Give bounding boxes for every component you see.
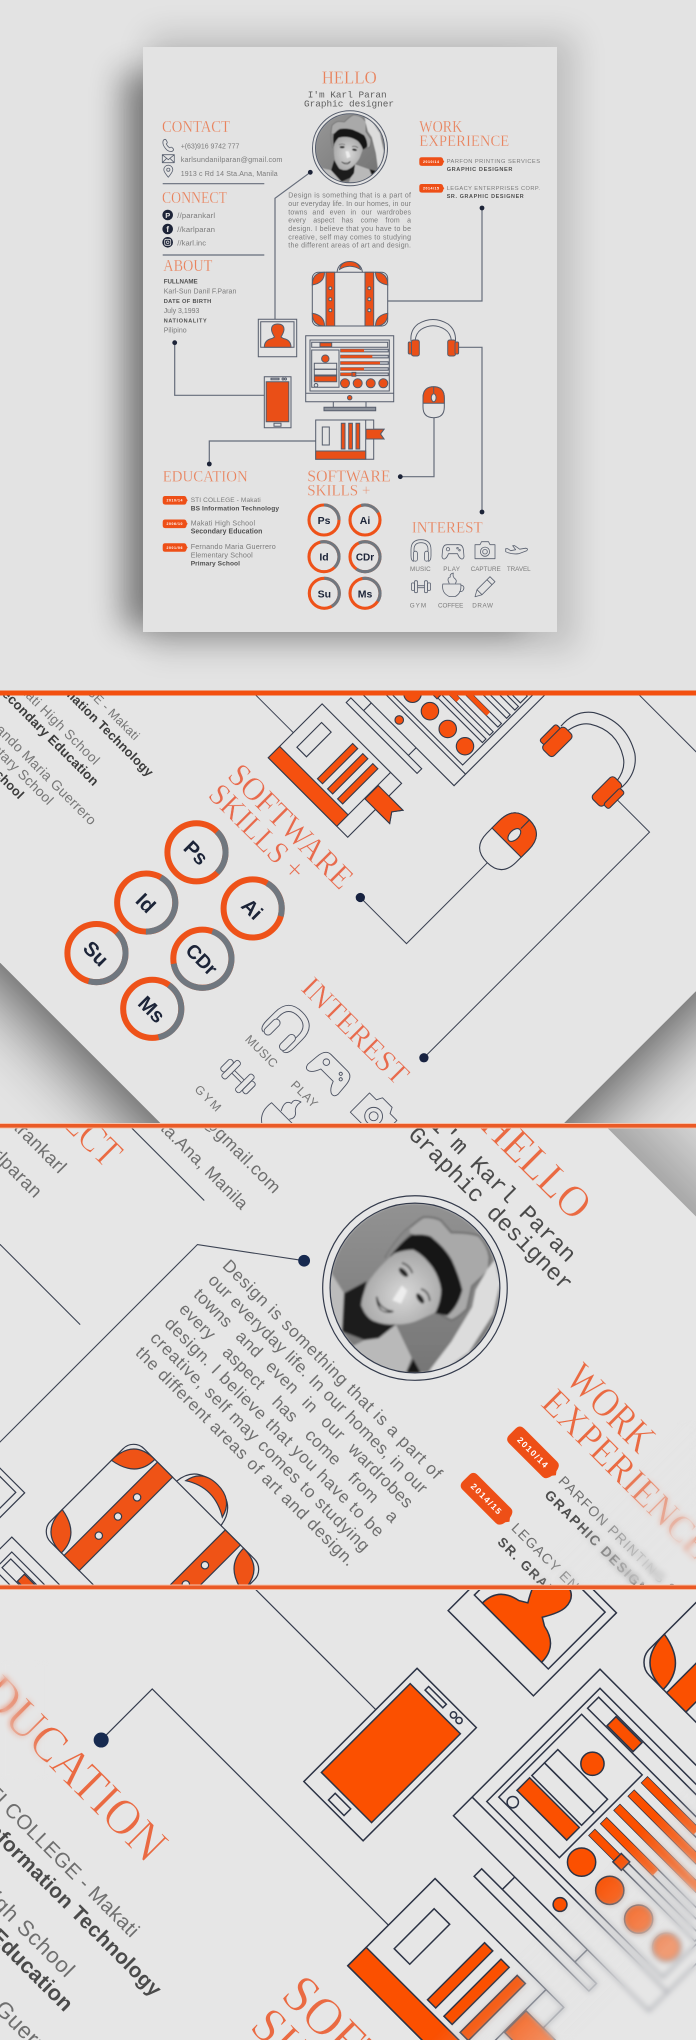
heading: software skills: SKILLS + — [307, 483, 370, 500]
work item 1 — [494, 1424, 696, 1660]
education list: 2001/06 — [166, 546, 183, 550]
interest icons — [211, 998, 404, 1191]
paragraph: the different areas of art and design. — [288, 243, 411, 250]
work item 1: 2010/14 — [423, 160, 439, 164]
about details — [164, 279, 236, 334]
education list: Elementary School — [191, 550, 253, 559]
icon: mouse — [423, 387, 444, 418]
paragraph: our everyday life. In our homes, in our — [288, 201, 412, 208]
heading: work experience: EXPERIENCE — [419, 133, 509, 150]
connector lines — [0, 1016, 611, 2040]
icon: headphones — [408, 320, 459, 356]
interest icons — [411, 540, 528, 597]
poster sheet — [143, 47, 557, 632]
icon: smartphone — [304, 1668, 476, 1841]
name and role: I'm Karl Paran — [308, 90, 387, 100]
heading: contact: CONTACT — [162, 117, 230, 136]
icon: instagram — [162, 237, 173, 248]
interest labels: DRAW — [472, 603, 493, 610]
icon: monitor — [321, 575, 544, 798]
depth-of-field blur: portrait panel corner — [530, 1420, 696, 1584]
education list: Makati High School — [4, 669, 103, 768]
icon: pinterest — [162, 210, 173, 220]
education list: Primary School — [191, 561, 240, 568]
paragraph: towns and even in our wardrobes — [288, 209, 412, 216]
icon: smartphone — [264, 377, 291, 428]
work item 1 — [419, 157, 540, 171]
interest labels — [192, 1032, 321, 1161]
about details: Karl-Sun Danil F.Paran — [164, 288, 236, 295]
interest labels: COFFEE — [438, 603, 463, 610]
education list: 2006/10 — [166, 522, 183, 526]
heading: work experience: WORK — [557, 1355, 664, 1462]
heading: interest: INTEREST — [412, 519, 483, 536]
heading: hello: HELLO — [322, 68, 377, 88]
skill rings: CDr — [181, 940, 222, 981]
icon: suitcase — [636, 1519, 696, 1830]
paragraph: design. I believe that you have to be — [161, 1313, 389, 1541]
interest labels: MUSIC — [410, 566, 431, 573]
rotated poster sheet — [0, 696, 696, 1123]
paragraph: Design is something that is a part of — [288, 193, 411, 200]
interest labels: GYM — [192, 1082, 224, 1114]
panel: full resume poster — [122, 34, 576, 650]
paragraph: creative, self may comes to studying — [146, 1328, 374, 1555]
work item 1: 2010/14 — [515, 1435, 550, 1470]
education list: Makati High School — [191, 521, 255, 528]
portrait photo — [312, 111, 388, 186]
icon: portrait frame — [258, 319, 297, 357]
education list — [0, 637, 168, 856]
work item 2 — [419, 184, 540, 198]
heading: software skills: SOFTWARE — [307, 467, 391, 486]
dividers — [0, 1024, 204, 1325]
paragraph: every aspect has come from a — [175, 1299, 403, 1527]
heading: work experience: WORK — [419, 117, 463, 136]
heading: about: ABOUT — [163, 256, 212, 275]
skill rings: Ps — [318, 515, 331, 527]
name and role — [304, 91, 394, 108]
connect handles — [177, 212, 215, 246]
skill rings — [47, 802, 305, 1060]
icon: pinterest: P — [165, 211, 170, 220]
portrait photo — [284, 1158, 545, 1419]
depth-of-field blur: devices panel corner — [400, 1780, 696, 2040]
skill rings: CDr — [356, 553, 374, 564]
about details: FULLNAME — [164, 279, 198, 286]
paragraph: Design is something that is a part of — [219, 1255, 447, 1483]
interest labels: PLAY — [443, 566, 461, 573]
icon: phone — [163, 139, 174, 152]
work item 2 — [447, 1471, 683, 1707]
panel: close-up of portrait and paragraph — [0, 731, 696, 2040]
paragraph: towns and even in our wardrobes — [190, 1284, 418, 1512]
heading: software skills: SKILLS + — [202, 776, 313, 887]
work item 2: SR. GRAPHIC DESIGNER — [447, 194, 524, 200]
education list: Fernando Maria Guerrero — [191, 542, 276, 551]
icon: facebook — [162, 224, 173, 234]
paragraph: creative, self may comes to studying — [288, 234, 411, 241]
heading: education: EDUCATION — [163, 469, 248, 486]
skill rings: Ai — [360, 515, 370, 527]
interest labels: PLAY — [288, 1078, 321, 1111]
education list — [163, 496, 279, 568]
work item 2: LEGACY ENTERPRISES CORP. — [447, 186, 540, 192]
icon: location pin — [164, 165, 173, 177]
name and role: I'm Karl Paran — [425, 1113, 581, 1268]
icon: monitor — [0, 1537, 165, 1821]
panel: close-up of devices and education — [0, 984, 696, 2040]
connect handles: //parankarl — [177, 211, 215, 220]
interest labels: GYM — [410, 603, 426, 610]
dividers — [163, 184, 264, 255]
about details: July 3,1993 — [164, 308, 199, 315]
contact details: 1913 c Rd 14 Sta.Ana, Manila — [181, 171, 278, 178]
skill rings: Su — [78, 937, 112, 971]
heading: software skills: SOFTWARE — [220, 757, 360, 897]
contact details: karlsundanilparan@gmail.com — [181, 155, 282, 164]
skill rings: Id — [319, 552, 329, 564]
icon: monitor — [434, 1669, 696, 2031]
contact details: 1913 c Rd 14 Sta.Ana, Manila — [69, 1030, 253, 1214]
connector lines — [172, 170, 484, 514]
connect handles: //karlparan — [177, 225, 215, 234]
skill rings: Id — [131, 890, 159, 918]
icon: book — [348, 1879, 587, 2040]
education list: STI COLLEGE - Makati — [191, 497, 261, 504]
education list: 2010/14 — [166, 499, 183, 503]
icon: book — [316, 420, 384, 459]
orange separator bars — [0, 690, 696, 1590]
skill rings: Ps — [179, 837, 212, 870]
about details: NATIONALITY — [164, 319, 207, 325]
heading: work experience — [419, 121, 508, 146]
contact details: karlsundanilparan@gmail.com — [94, 1006, 285, 1197]
icon: portrait frame — [0, 1426, 25, 1558]
contact details — [181, 143, 282, 178]
icon: book — [268, 704, 416, 851]
work item 1: GRAPHIC DESIGNER — [447, 167, 512, 173]
about details: DATE OF BIRTH — [164, 299, 211, 305]
name and role: Graphic designer — [304, 99, 394, 110]
work item 2: LEGACY ENTERPRISES CORP. — [509, 1520, 682, 1693]
contact details: +(63)916 9742 777 — [181, 143, 239, 150]
icon: mouse — [472, 805, 544, 877]
icon: monitor — [306, 336, 394, 411]
icon: suitcase — [40, 1419, 284, 1663]
icon: headphones — [537, 693, 656, 812]
icon: suitcase — [312, 262, 388, 326]
work item 2: 2014/15 — [423, 187, 439, 191]
education list: STI COLLEGE - Makati — [36, 637, 142, 743]
connect handles: //karl.inc — [177, 239, 206, 248]
education list: BS Information Technology — [191, 505, 279, 512]
heading: software skills — [308, 470, 390, 496]
interest labels: TRAVEL — [507, 566, 531, 573]
heading: hello: HELLO — [471, 1099, 601, 1229]
education list: Secondary Education — [191, 529, 262, 536]
work item 1: PARFON PRINTING SERVICES — [447, 159, 540, 165]
paragraph — [288, 193, 412, 250]
education list: BS Information Technology — [25, 648, 157, 780]
heading: interest: INTEREST — [295, 971, 415, 1091]
depth-of-field blur: education heading — [0, 1660, 50, 1780]
panel: close-up of skills and interests — [0, 696, 696, 1123]
icon: mail — [162, 155, 174, 163]
paragraph: our everyday life. In our homes, in our — [204, 1270, 432, 1498]
paragraph: the different areas of art and design. — [132, 1342, 359, 1570]
paragraph: every aspect has come from a — [288, 218, 411, 225]
work item 2: SR. GRAPHIC DESIGNER — [495, 1534, 639, 1679]
connector lines — [256, 696, 696, 1062]
rotated poster sheet — [0, 752, 696, 2040]
icon: portrait frame — [448, 1528, 616, 1696]
interest labels: MUSIC — [242, 1032, 281, 1071]
education list — [0, 1771, 184, 2040]
heading: connect: CONNECT — [162, 188, 227, 207]
skill rings: Su — [318, 588, 331, 600]
interest labels — [410, 566, 531, 610]
connector lines — [0, 1005, 696, 2040]
work item 1: GRAPHIC DESIGNER — [542, 1487, 667, 1612]
skill rings: Ai — [236, 895, 266, 925]
paragraph — [132, 1255, 447, 1570]
interest labels: CAPTURE — [471, 566, 501, 573]
skill rings: Ms — [358, 588, 372, 600]
skill rings: Ms — [133, 992, 169, 1028]
about details: Pilipino — [164, 327, 187, 334]
skill rings — [306, 502, 385, 611]
poster sheet close-up — [0, 1587, 696, 2040]
paragraph: design. I believe that you have to be — [288, 226, 411, 233]
work item 2: 2014/15 — [469, 1481, 504, 1516]
icon: facebook: f — [166, 224, 169, 234]
name and role: Graphic designer — [402, 1122, 577, 1297]
